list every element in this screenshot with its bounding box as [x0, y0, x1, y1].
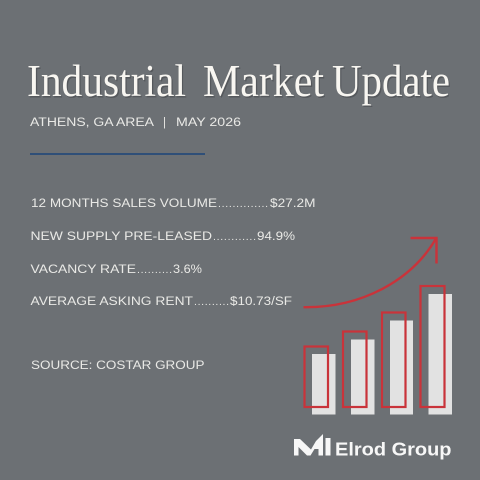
- stat: sales volume: 12 MONTHS SALES VOLUME: [31, 198, 217, 210]
- stat: asking rent: $10.73/SF: [230, 296, 292, 308]
- stat: pre-leased: NEW SUPPLY PRE-LEASED: [30, 231, 212, 243]
- stat: vacancy: 3.6%: [173, 264, 202, 276]
- stat: sales volume: $27.2M: [270, 198, 316, 210]
- stat: vacancy: [30, 264, 202, 276]
- divider line: [30, 153, 205, 155]
- red outlined bars: [304, 286, 444, 407]
- title: Market: [203, 55, 324, 106]
- title: Industrial: [28, 56, 187, 107]
- subtitle: [30, 117, 241, 129]
- subtitle: MAY 2026: [176, 117, 241, 129]
- stats list: [30, 198, 316, 308]
- title: Market: [204, 56, 326, 107]
- icon: rising bar chart: [304, 238, 452, 414]
- gray bars: [312, 294, 452, 414]
- title: Industrial: [27, 55, 186, 106]
- stat: sales volume: ..............: [218, 198, 268, 210]
- stat: pre-leased: [30, 231, 295, 243]
- title: Update: [333, 56, 451, 107]
- stat: asking rent: [30, 296, 292, 308]
- stat: asking rent: ..........: [194, 296, 229, 308]
- stat: asking rent: AVERAGE ASKING RENT: [30, 296, 193, 308]
- logo mark: NAI: [294, 434, 330, 456]
- logo text: Elrod Group: [335, 438, 452, 460]
- title: [27, 55, 451, 107]
- stat: pre-leased: 94.9%: [257, 231, 295, 243]
- subtitle: ATHENS, GA AREA: [30, 117, 154, 129]
- subtitle: |: [163, 117, 166, 129]
- arrow: [304, 238, 436, 307]
- title: Update: [332, 55, 450, 106]
- source note: SOURCE: COSTAR GROUP: [31, 360, 205, 372]
- stat: pre-leased: ............: [213, 231, 256, 243]
- logo: NAI Elrod Group: [294, 434, 452, 460]
- stat: sales volume: [31, 198, 316, 210]
- stat: vacancy: ..........: [137, 264, 172, 276]
- stat: vacancy: VACANCY RATE: [30, 264, 136, 276]
